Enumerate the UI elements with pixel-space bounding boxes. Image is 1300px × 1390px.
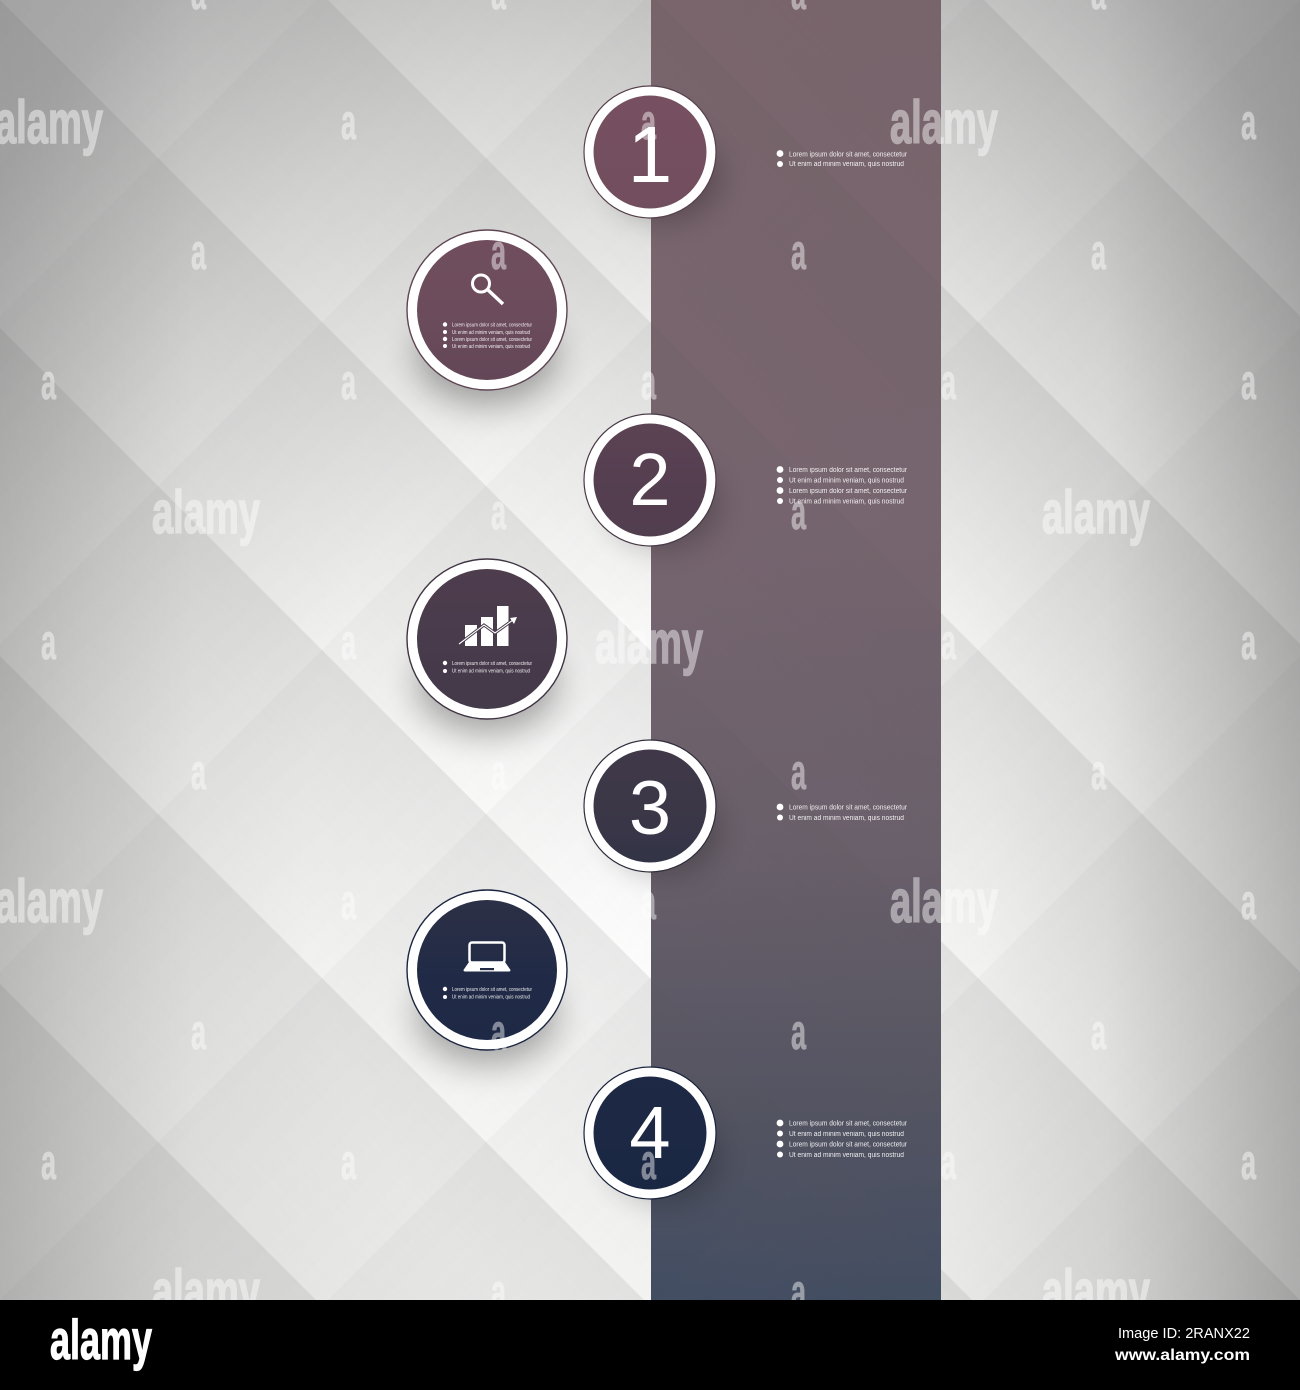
- laptop card text: Ut enim ad minim veniam, quis nostrud: [452, 994, 530, 1000]
- watermarks: a: [341, 1134, 357, 1190]
- watermarks: a: [791, 484, 807, 540]
- watermarks: a: [1241, 94, 1257, 150]
- watermarks: a: [491, 1004, 507, 1060]
- step 2 text: Ut enim ad minim veniam, quis nostrud: [789, 498, 904, 506]
- step 3 text: Lorem ipsum dolor sit amet, consectetur: [789, 804, 908, 812]
- step 4 text: Ut enim ad minim veniam, quis nostrud: [789, 1152, 904, 1159]
- watermarks: a: [41, 1134, 57, 1190]
- watermarks: a: [791, 1264, 807, 1320]
- watermarks: a: [1241, 874, 1257, 930]
- watermarks: a: [1241, 614, 1257, 670]
- card: laptop: [407, 890, 567, 1064]
- watermarks: a: [41, 354, 57, 410]
- watermarks: a: [641, 1134, 657, 1190]
- step 4 text: Lorem ipsum dolor sit amet, consectetur: [789, 1142, 908, 1148]
- step 2 text: [777, 466, 908, 506]
- icon: bar chart with arrow: [459, 606, 517, 646]
- step 2 text: Lorem ipsum dolor sit amet, consectetur: [789, 488, 908, 495]
- step 2 text: Ut enim ad minim veniam, quis nostrud: [789, 478, 904, 484]
- step 4 text: [777, 1120, 908, 1159]
- watermarks: a: [491, 744, 507, 800]
- card: search: [407, 230, 567, 404]
- watermarks: alamy: [1042, 1258, 1150, 1325]
- search card text: Lorem ipsum dolor sit amet, consectetur: [452, 337, 532, 343]
- image id: Image ID: 2RANX22: [1118, 1325, 1250, 1342]
- step 2 badge: 2: [629, 438, 671, 521]
- step 3 text: Ut enim ad minim veniam, quis nostrud: [789, 815, 904, 822]
- step 1 badge: [584, 86, 719, 220]
- watermarks: a: [191, 744, 207, 800]
- watermarks: a: [791, 1004, 807, 1060]
- step 2 text: Lorem ipsum dolor sit amet, consectetur: [789, 467, 908, 474]
- watermarks: a: [1091, 1004, 1107, 1060]
- step 4 badge: [584, 1067, 719, 1201]
- step 4 badge: 4: [629, 1091, 671, 1174]
- step 2 badge: [584, 414, 719, 548]
- watermarks: a: [941, 354, 957, 410]
- watermarks: alamy: [890, 868, 998, 935]
- step 3 badge: [584, 740, 719, 874]
- website: www.alamy.com: [1114, 1347, 1250, 1364]
- vertical timeline band: [651, 0, 941, 1300]
- watermarks: a: [1241, 1134, 1257, 1190]
- watermarks: a: [1241, 354, 1257, 410]
- step 3 badge: 3: [629, 766, 671, 851]
- watermarks: a: [41, 614, 57, 670]
- watermarks: a: [1091, 744, 1107, 800]
- step 3 text: [777, 804, 908, 822]
- step 1 text: [777, 150, 908, 168]
- watermarks: alamy: [152, 479, 260, 546]
- card: growth chart: [407, 559, 567, 733]
- search card text: Ut enim ad minim veniam, quis nostrud: [452, 344, 530, 350]
- footer logo: alamy: [50, 1308, 152, 1371]
- step 4 text: Lorem ipsum dolor sit amet, consectetur: [789, 1120, 908, 1128]
- watermarks: a: [491, 224, 507, 280]
- watermarks: a: [341, 354, 357, 410]
- watermarks: a: [791, 744, 807, 800]
- watermarks: alamy: [595, 609, 703, 676]
- icon: laptop: [464, 942, 510, 972]
- watermarks: a: [641, 94, 657, 150]
- watermarks: a: [641, 874, 657, 930]
- watermarks: a: [191, 1004, 207, 1060]
- watermarks: alamy: [0, 89, 103, 156]
- chart card text: Lorem ipsum dolor sit amet, consectetur: [452, 661, 532, 667]
- watermarks: a: [341, 94, 357, 150]
- step 1 badge: 1: [628, 110, 672, 199]
- watermarks: a: [341, 874, 357, 930]
- watermarks: a: [941, 614, 957, 670]
- footer bar: [0, 1300, 1300, 1390]
- laptop card text: Lorem ipsum dolor sit amet, consectetur: [452, 987, 532, 993]
- search card text: Lorem ipsum dolor sit amet, consectetur: [452, 322, 532, 328]
- search card text: [443, 322, 532, 350]
- laptop card text: [443, 987, 532, 1000]
- watermarks: a: [641, 354, 657, 410]
- icon: magnifier: [472, 275, 503, 304]
- watermarks: a: [491, 484, 507, 540]
- watermarks: alamy: [152, 1258, 260, 1325]
- watermarks: alamy: [1042, 479, 1150, 546]
- step 4 text: Ut enim ad minim veniam, quis nostrud: [789, 1131, 904, 1138]
- watermarks: a: [191, 224, 207, 280]
- watermarks: a: [341, 614, 357, 670]
- watermarks: a: [491, 1264, 507, 1320]
- step 1 text: Ut enim ad minim veniam, quis nostrud: [789, 161, 904, 168]
- watermarks: alamy: [0, 868, 103, 935]
- chart card text: [443, 661, 532, 674]
- watermarks: a: [791, 224, 807, 280]
- watermarks: a: [941, 1134, 957, 1190]
- watermarks: a: [1091, 224, 1107, 280]
- step 1 text: Lorem ipsum dolor sit amet, consectetur: [789, 152, 908, 158]
- watermarks: alamy: [890, 89, 998, 156]
- chart card text: Ut enim ad minim veniam, quis nostrud: [452, 668, 530, 674]
- search card text: Ut enim ad minim veniam, quis nostrud: [452, 330, 530, 336]
